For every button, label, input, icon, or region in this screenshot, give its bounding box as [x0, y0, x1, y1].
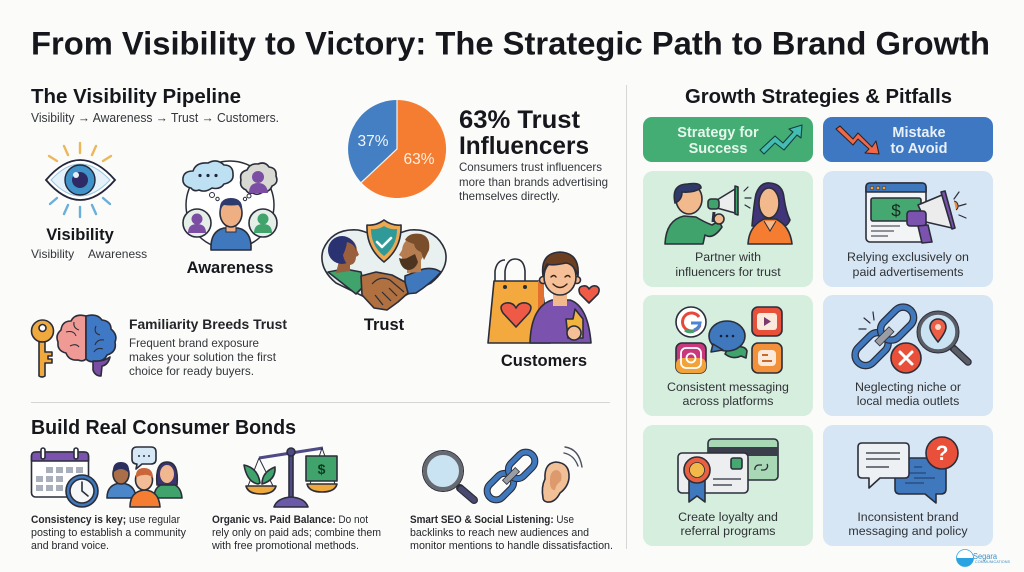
panel: build real consumer bonds — [31, 416, 613, 552]
label: awareness: Awareness — [187, 259, 273, 277]
icon: brain — [57, 315, 116, 376]
card: consistent messaging: across platforms — [683, 394, 773, 408]
sub label: awareness: Awareness — [88, 247, 147, 261]
card: consistent messaging — [643, 295, 813, 416]
card: neglecting niche media: Neglecting niche or — [855, 380, 961, 394]
label: visibility: Visibility — [46, 226, 115, 244]
stat description: Consumers trust influencers — [459, 160, 602, 174]
panel: influencer stat — [348, 100, 608, 203]
text: smart seo — [410, 514, 613, 552]
pie chart: 63 percent vs 37 percent — [348, 100, 446, 198]
callout: familiarity breeds trust — [129, 317, 287, 378]
text: organic vs paid: rely only on paid ads; combine them — [212, 527, 381, 539]
heading: build real consumer bonds: Build Real Consumer Bonds — [31, 416, 296, 439]
label: trust: Trust — [364, 316, 405, 334]
header: strategy for success: Success — [689, 141, 747, 157]
logo: segara — [956, 550, 1011, 566]
card: partner with influencers: influencers for trust — [675, 265, 781, 279]
text: consistency — [31, 514, 186, 552]
card: partner with influencers — [643, 171, 813, 287]
pipeline subtitle: Visibility → Awareness → Trust → Customers. — [31, 111, 279, 125]
icon: key — [32, 320, 54, 377]
stat description: themselves directly. — [459, 189, 560, 203]
header: strategy for success: Strategy for — [677, 125, 759, 141]
header: mistake to avoid — [823, 117, 993, 162]
icon: calendar and clock — [32, 448, 98, 507]
text: organic vs paid: Organic vs. Paid Balance: Do not — [212, 514, 368, 526]
stat heading: 63% Trust — [459, 106, 581, 134]
card: relying on paid ads: Relying exclusively on — [847, 250, 969, 264]
pie chart: 63 percent vs 37 percent: 37% — [357, 133, 389, 150]
card: relying on paid ads: paid advertisements — [853, 265, 963, 279]
stat heading: Influencers — [459, 132, 589, 160]
callout: familiarity breeds trust: makes your solution the first — [129, 350, 277, 364]
sub label: visibility awareness: Visibility — [31, 247, 74, 261]
card: loyalty and referral: referral programs — [680, 524, 776, 538]
text: smart seo: monitor mentions to handle dissatisfaction. — [410, 540, 613, 552]
icon: community people — [107, 447, 182, 507]
panel: visibility pipeline — [31, 85, 287, 378]
header: mistake to avoid: to Avoid — [891, 141, 947, 157]
card: inconsistent messaging: Inconsistent brand — [857, 510, 959, 524]
icon: awareness network — [183, 161, 277, 250]
callout: familiarity breeds trust: Frequent brand exposure — [129, 336, 259, 350]
icon: eye — [46, 143, 115, 217]
icon: magnifier, link and ear — [422, 447, 582, 504]
card: inconsistent messaging — [823, 425, 993, 546]
panel: growth strategies and pitfalls — [643, 86, 993, 546]
text: consistency: posting to establish a community — [31, 527, 186, 539]
card: relying on paid ads: $ — [891, 201, 901, 220]
card: inconsistent messaging: ? — [936, 442, 948, 465]
card: loyalty and referral: Create loyalty and — [678, 510, 778, 524]
stat description — [459, 160, 608, 203]
header: mistake to avoid: Mistake — [892, 125, 946, 141]
text: consistency: Consistency is key; use regular — [31, 514, 180, 526]
icon: trust handshake — [322, 220, 446, 310]
title: From Visibility to Victory: The Strategic Path to Brand Growth — [31, 26, 990, 62]
icon: balance scale — [244, 448, 337, 507]
icon: customer with shopping bag — [488, 252, 599, 343]
text: organic vs paid: with free promotional methods. — [211, 540, 359, 552]
logo: segara: Segara — [973, 552, 998, 561]
card: partner with influencers: Partner with — [695, 250, 761, 264]
card: inconsistent messaging: messaging and policy — [848, 524, 968, 538]
heading: the visibility pipeline: The Visibility Pipeline — [31, 85, 241, 108]
header: strategy for success — [643, 117, 813, 162]
card: neglecting niche media — [823, 295, 993, 416]
text: organic vs paid — [211, 514, 381, 552]
text: smart seo: Smart SEO & Social Listening: Use — [410, 514, 574, 526]
heading: growth strategies and pitfalls: Growth Strategies & Pitfalls — [685, 86, 952, 108]
stat description: more than brands advertising — [459, 175, 608, 189]
callout: familiarity breeds trust: choice for ready buyers. — [129, 364, 254, 378]
stat heading — [459, 106, 589, 160]
logo: segara: COMMUNICATIONS — [975, 560, 1011, 564]
icon: balance scale: $ — [318, 461, 326, 477]
text: consistency: and brand voice. — [31, 540, 109, 552]
pie chart: 63 percent vs 37 percent: 63% — [403, 151, 435, 168]
card: loyalty and referral — [643, 425, 813, 546]
card: neglecting niche media: local media outlets — [857, 394, 959, 408]
text: smart seo: backlinks to reach new audiences and — [410, 527, 589, 539]
callout: familiarity breeds trust: Familiarity Breeds Trust — [129, 317, 287, 332]
card: consistent messaging: Consistent messaging — [667, 380, 789, 394]
card: relying on paid ads — [823, 171, 993, 287]
label: customers: Customers — [501, 352, 587, 370]
